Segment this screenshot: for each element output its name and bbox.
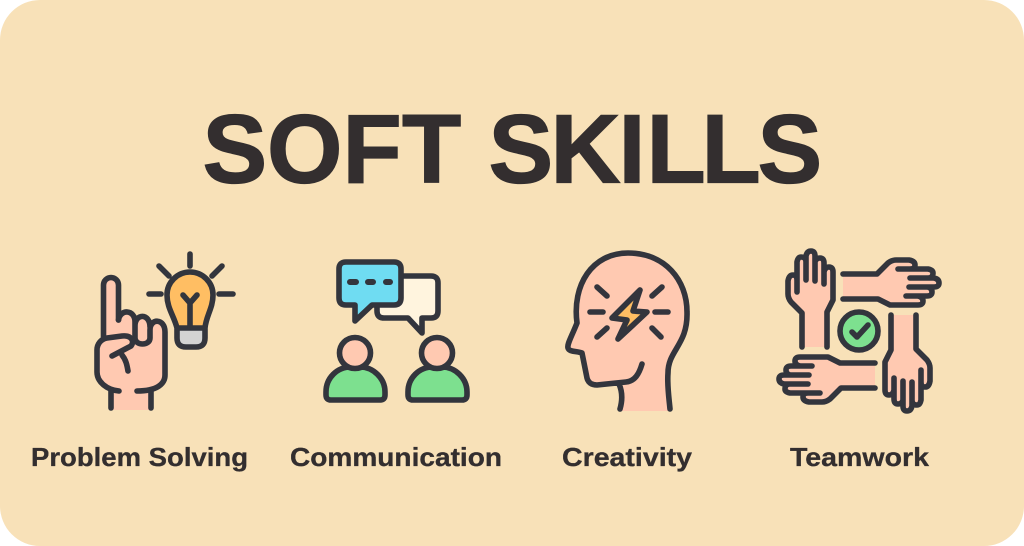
label: Creativity: Creativity bbox=[562, 442, 693, 472]
icon: head with lightning bolt bbox=[568, 253, 687, 411]
head outline bbox=[568, 253, 687, 409]
person left bbox=[326, 338, 385, 400]
hand bbox=[97, 278, 165, 410]
label: Teamwork: Teamwork bbox=[790, 442, 930, 472]
head silhouette bbox=[568, 253, 687, 411]
blue speech bubble bbox=[339, 262, 401, 321]
title: SOFT SKILLS bbox=[202, 94, 822, 204]
hand top left bbox=[788, 251, 833, 347]
thought rays bbox=[590, 287, 668, 337]
light bulb bbox=[149, 254, 233, 347]
icon: four hands teamwork bbox=[779, 251, 939, 411]
green check badge bbox=[840, 312, 878, 350]
icon: two people talking bbox=[326, 262, 467, 400]
person right bbox=[408, 338, 467, 400]
cream speech bubble bbox=[377, 276, 438, 333]
label: Problem Solving: Problem Solving bbox=[31, 442, 248, 472]
label: Communication: Communication bbox=[290, 442, 502, 472]
icon: hand pointing up with light bulb bbox=[97, 254, 233, 410]
lightning bolt bbox=[612, 290, 647, 339]
hand top right bbox=[843, 260, 939, 305]
chat dots bbox=[350, 279, 390, 285]
hand bottom left bbox=[779, 357, 875, 402]
hand bottom right bbox=[885, 315, 930, 411]
